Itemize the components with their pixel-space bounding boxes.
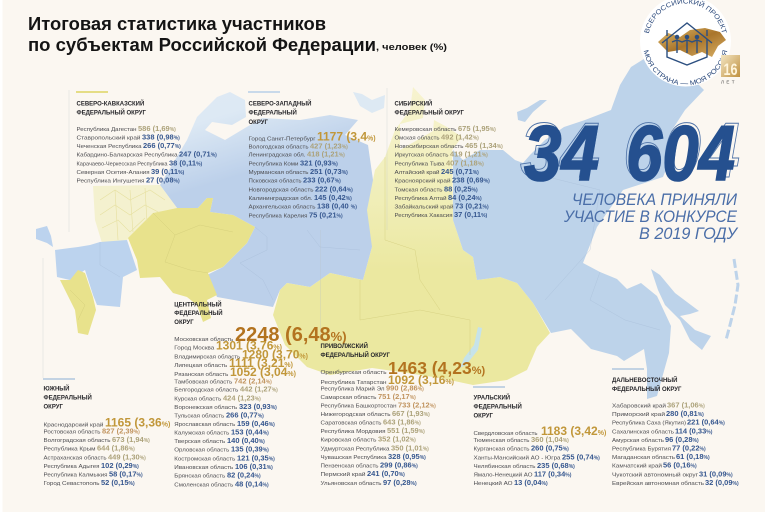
list: North Caucasus regions: 38 (0,11%) [169,158,202,167]
list: Central regions: 742 (2,14%) [234,376,272,385]
list: Ural regions: Ханты-Мансийский АО - Югра [474,454,561,461]
list: Northwestern regions: Псковская область [248,179,302,185]
list: Volga regions: Нижегородская область [320,412,390,418]
list: Volga regions: 1092 (3,16%) [388,373,454,387]
list: Northwestern regions: Мурманская область [248,170,308,176]
list: Ural regions: 255 (0,74%) [562,452,600,461]
list: Central regions: Брянская область [174,474,225,480]
list: Central regions: 153 (0,44%) [231,428,269,437]
region: Kaliningrad exclave [36,226,53,247]
list: Central regions: Калужская область [174,431,229,437]
list: Central regions: 82 (0,24%) [227,471,261,480]
heading: Southern: ЮЖНЫЙ [44,385,69,393]
list: North Caucasus regions: 39 (0,11%) [151,167,184,176]
list: Siberian regions: 492 (1,42%) [441,132,479,141]
heading: Ural: УРАЛЬСКИЙ [474,394,510,402]
region: Southern blue [55,240,137,307]
list: Southern regions: 449 (1,30%) [108,452,146,461]
heading: North Caucasus: ФЕДЕРАЛЬНЫЙ ОКРУГ [76,109,146,117]
big number: 34 604: 604 [626,109,735,197]
list: Far Eastern regions: 77 (0,22%) [672,444,706,453]
heading: Siberian: СИБИРСКИЙ [394,100,432,108]
list: Northwestern regions [248,130,376,219]
list: Volga regions: 733 (2,12%) [398,400,436,410]
list: North Caucasus regions: Ставропольский край [76,135,140,142]
list: Siberian regions: 465 (1,34%) [465,141,503,150]
heading: Volga: ПРИВОЛЖСКИЙ [320,342,368,350]
list: Northwestern regions: 251 (0,73%) [310,167,348,176]
list: Far Eastern regions: 31 (0,09%) [699,469,733,478]
list: Volga regions: 751 (2,17%) [378,392,416,401]
list: North Caucasus regions: Северная Осетия-Алания [76,170,150,176]
region: pale Arctic islands [353,92,385,113]
list: Southern regions: Краснодарский край [44,422,104,428]
list: Siberian regions: 407 (1,18%) [446,158,484,167]
list: Far Eastern regions: 280 (0,81%) [666,409,704,418]
list: North Caucasus regions: 266 (0,77%) [143,141,181,150]
list: Northwestern regions: Республика Коми [248,161,298,167]
lake Baikal [460,327,482,368]
badge: 16 лет [721,55,740,84]
list: Southern regions: Волгоградская область [44,438,110,444]
heading: Ural: ОКРУГ [474,413,493,419]
big number: 34 604: 34 [524,109,599,197]
logo: Всероссийский проект [640,0,731,86]
list: Central regions: 442 (1,27%) [240,385,278,394]
list: Central regions: Белгородская область [174,388,238,394]
list: Southern regions: 644 (1,86%) [97,444,135,453]
title [28,14,447,55]
list: Ural regions: 260 (0,75%) [531,444,569,453]
list: Far Eastern regions: Камчатский край [612,463,662,470]
list: Southern regions: 102 (0,29%) [101,461,139,470]
list: Southern regions: Республика Крым [44,447,96,453]
guide lines [43,88,387,378]
list: Far Eastern regions [612,400,739,487]
list: Central regions: Владимирская область [174,354,240,360]
list: Southern regions: Республика Калмыкия [44,473,108,479]
list: North Caucasus regions: Кабардино-Балкарская Республика [76,153,178,159]
panel: Volga district [320,342,485,487]
region borders [70,157,660,355]
list: Northwestern regions: Новгородская область [248,187,314,193]
list: Central regions: Тамбовская область [174,379,232,385]
list: Central regions [174,324,347,488]
list: Volga regions: Ульяновская область [320,481,382,487]
title: Итоговая статистика участников [28,14,326,34]
list: Northwestern regions: 138 (0,40 %) [317,202,357,211]
icon: house with people [662,23,712,65]
list: Volga regions: 551 (1,59%) [387,426,425,435]
list: Northwestern regions: Ленинградская обл. [248,153,306,159]
list: Northwestern regions: 1177 (3,4%) [317,130,376,144]
heading: Northwestern: ОКРУГ [248,120,268,126]
list: Volga regions: Удмуртская Республика [320,446,390,452]
region: North Caucasus yellow [60,270,96,335]
list: Ural regions: Челябинская область [474,464,536,470]
list: Volga regions: 990 (2,86%) [386,384,424,392]
big number: 34 604: 604 [623,106,740,194]
list: Volga regions: 1463 (4,23%) [388,358,485,378]
list: Far Eastern regions: Магаданская область [612,455,675,461]
list: Southern regions: Астраханская область [44,455,106,461]
panel: Southern district [43,378,170,487]
heading: Central: ОКРУГ [174,320,194,326]
list: Central regions: 121 (0,35%) [237,453,275,462]
list: Siberian regions: Томская область [394,187,442,193]
list: Central regions: Город Москва [174,346,215,352]
heading: Northwestern: СЕВЕРО-ЗАПАДНЫЙ [248,100,311,108]
caption: В 2019 ГОДУ [639,225,738,243]
list: Northwestern regions: Архангельская область [248,205,316,211]
big number: 34 604 [520,106,740,197]
list: Central regions: Воронежская область [174,405,237,411]
region: Okhotsk coast island [651,269,711,350]
list: Southern regions: 1165 (3,36%) [105,416,170,430]
heading: Far Eastern: ДАЛЬНЕВОСТОЧНЫЙ [612,376,678,384]
list: Northwestern regions: Калининградская обл. [248,196,313,202]
list: Volga regions: Республика Мордовия [320,429,386,435]
badge: 16 лет: 16 [724,60,738,79]
list: Central regions: Костромская область [174,456,235,462]
list: Central regions: 2248 (6,48%) [235,324,347,346]
list: Central regions: 48 (0,14%) [235,479,269,488]
heading: Central: ЦЕНТРАЛЬНЫЙ [174,300,222,308]
list: Ural regions [474,424,606,487]
list: Central regions: Тульская область [174,413,224,419]
list: Volga regions: Республика Башкортостан [320,404,396,410]
list: Far Eastern regions: Приморский край [612,411,665,418]
list: Volga regions: Республика Марий Эл [320,386,385,392]
list: Southern regions: 827 (2,39%) [102,426,140,436]
panel: North Caucasus district [76,91,217,184]
list: North Caucasus regions: Карачаево-Черкесская Республика [76,161,168,167]
list: Central regions: 159 (0,46%) [237,419,275,428]
list: Volga regions [320,358,485,487]
list: Central regions: 1280 (3,70%) [242,348,308,362]
list: Northwestern regions: Республика Карелия [248,213,308,219]
region: Northwestern district [160,92,375,307]
list: Central regions: 1052 (3,04%) [230,365,296,379]
list: Central regions: 140 (0,40%) [227,436,265,445]
panel: Siberian district [394,100,503,219]
badge: 16 лет: ЛЕТ [721,80,737,84]
heading: North Caucasus: СЕВЕРО-КАВКАЗСКИЙ [76,100,144,108]
list: Volga regions: 352 (1,02%) [378,434,416,444]
list: North Caucasus regions: 586 (1,69%) [138,124,176,133]
heading: Central: ФЕДЕРАЛЬНЫЙ [174,309,223,317]
list: Southern regions: 52 (0,15%) [101,478,135,487]
big number: 34 604: 34 [520,106,600,194]
list: Southern regions: Республика Адыгея [44,464,100,470]
list: Northwestern regions: 233 (0,67%) [303,176,341,185]
caption [563,191,738,243]
list: Far Eastern regions: Еврейская автономная область [612,480,704,487]
list: Volga regions: 350 (1,01%) [391,444,429,452]
region: Far East blue [453,57,704,399]
list: Volga regions: Кировская область [320,438,376,444]
list: Ural regions: Ненецкий АО [474,480,513,487]
heading: Ural: ФЕДЕРАЛЬНЫЙ [474,402,522,410]
list: Central regions: 1301 (3,76%) [216,338,282,352]
list: Southern regions: Город Севастополь [44,481,100,487]
list: North Caucasus regions: Республика Дагестан [76,127,136,133]
list: Siberian regions: 245 (0,71%) [441,167,479,176]
list: Siberian regions: Забайкальский край [394,204,454,211]
list: Central regions: 1111 (3,21%) [229,356,293,370]
list: Volga regions: 643 (1,86%) [383,418,421,426]
list: Far Eastern regions: Амурская область [612,438,664,444]
list: Volga regions: Оренбургская область [320,370,386,376]
list: Siberian regions: 419 (1,21%) [450,150,488,159]
list: Siberian regions: 37 (0,11%) [454,210,487,219]
list: North Caucasus regions: Чеченская Республика [76,144,142,150]
logo text: bottom arc: МОЯ СТРАНА — МОЯ РОССИЯ [644,50,728,86]
list: Siberian regions: 73 (0,21%) [455,202,489,211]
list: Central regions: Липецкая область [174,363,227,369]
map of Russia [36,57,738,399]
list: Volga regions: 667 (1,93%) [392,409,430,418]
list: Northwestern regions: Город Санкт-Петербург [248,136,316,142]
caption: ЧЕЛОВЕКА ПРИНЯЛИ [572,191,737,209]
list: Far Eastern regions: Республика Саха (Якутия) [612,421,686,427]
list: Siberian regions: Иркутская область [394,153,448,159]
list: Far Eastern regions: 61 (0,18%) [676,452,710,461]
list: Central regions: Тверская область [174,439,225,445]
title: по субъектам Российской Федерации [28,35,376,55]
list: Volga regions: 328 (0,95%) [388,452,426,461]
list: Central regions: Рязанская область [174,372,228,378]
list: Far Eastern regions: 367 (1,06%) [667,400,705,409]
list: North Caucasus regions [76,124,217,184]
list: Ural regions: Свердловская область [474,431,538,437]
list: Volga regions: Пензенская область [320,464,378,470]
list: Ural regions: 360 (1,04%) [531,435,569,444]
list: Central regions: Орловская область [174,448,229,454]
region: Siberia and Urals yellow [273,87,550,385]
list: Volga regions: 97 (0,28%) [383,478,417,487]
list: Far Eastern regions: Чукотский автономный округ [612,471,698,478]
list: Northwestern regions: 222 (0,64%) [315,184,353,193]
list: Central regions: Смоленская область [174,482,233,488]
list: Siberian regions: Омская область [394,135,440,141]
list: Volga regions: Самарская область [320,395,376,401]
list: Volga regions: Чувашская Республика [320,455,387,461]
heading: Far Eastern: ФЕДЕРАЛЬНЫЙ ОКРУГ [612,385,682,393]
list: Siberian regions: Новосибирская область [394,144,464,150]
list: Ural regions: Курганская область [474,447,530,453]
list: North Caucasus regions: 338 (0,98%) [142,133,180,142]
panel: Ural district [473,386,606,487]
list: Far Eastern regions: 96 (0,28%) [665,435,699,444]
list: Ural regions: 1183 (3,42%) [541,424,606,438]
list: Northwestern regions: 145 (0,42%) [314,193,352,202]
list: Southern regions: 673 (1,94%) [112,435,150,444]
list: Northwestern regions: Вологодская область [248,144,308,150]
region: northern islands [517,100,547,122]
heading: Southern: ФЕДЕРАЛЬНЫЙ [44,393,92,401]
list: Far Eastern regions: Республика Бурятия [612,447,671,453]
list: Far Eastern regions: 114 (0,33%) [675,426,712,435]
list: Volga regions: Пермский край [320,471,366,478]
list: Far Eastern regions: Хабаровский край [612,402,666,409]
list: Siberian regions: Республика Хакасия [394,213,452,219]
list: Siberian regions: 238 (0,69%) [452,176,490,185]
list: North Caucasus regions: 247 (0,71%) [179,150,217,159]
region: pale yellow west [93,185,177,243]
list: Central regions: 135 (0,39%) [231,445,269,454]
list: Siberian regions: Республика Тыва [394,161,445,167]
region: Central yellow [128,198,255,322]
list: Central regions: Курская область [174,396,221,402]
list: Central regions: Ивановская область [174,465,233,471]
list: North Caucasus regions: 27 (0,08%) [146,175,180,184]
list: Northwestern regions: 321 (0,93%) [300,158,338,167]
list: Far Eastern regions: 56 (0,16%) [663,461,697,470]
list: Volga regions: 241 (0,70%) [367,469,405,478]
list: Ural regions: 13 (0,04%) [514,478,548,487]
list: Volga regions: 299 (0,86%) [380,460,418,470]
list: Ural regions: 117 (0,34%) [534,469,571,478]
title: , человек (%) [376,42,447,53]
list: Southern regions [44,416,170,487]
list: Northwestern regions: 427 (1,23%) [310,141,348,150]
list: Volga regions: Республика Татарстан [320,380,386,386]
list: Siberian regions: 88 (0,25%) [444,184,478,193]
list: Far Eastern regions: Сахалинская область [612,429,674,435]
list: Siberian regions: Республика Алтай [394,195,446,202]
list: Southern regions: Ростовская область [44,430,100,436]
list: Ural regions: 235 (0,68%) [537,461,575,470]
list: Siberian regions [394,124,503,219]
caption: УЧАСТИЕ В КОНКУРСЕ [563,208,738,226]
list: Central regions: Московская область [174,337,233,343]
heading: Siberian: ФЕДЕРАЛЬНЫЙ ОКРУГ [394,109,464,117]
list: Southern regions: 58 (0,17%) [109,470,143,479]
panel: Central district [174,300,347,488]
list: Siberian regions: 84 (0,24%) [448,193,482,202]
heading: Northwestern: ФЕДЕРАЛЬНЫЙ [248,109,297,117]
heading: Southern: ОКРУГ [44,404,63,410]
list: Far Eastern regions: 221 (0,64%) [687,418,725,427]
region: Kuril islands [726,259,738,340]
list: Ural regions: Тюменская область [474,438,530,444]
list: Northwestern regions: 418 (1,21%) [307,150,345,159]
list: Far Eastern regions: 32 (0,09%) [705,478,739,487]
list: Siberian regions: 675 (1,95%) [458,124,496,133]
list: North Caucasus regions: Республика Ингушетия [76,178,144,184]
list: Central regions: Ярославская область [174,422,235,428]
heading: Volga: ФЕДЕРАЛЬНЫЙ ОКРУГ [320,351,390,359]
list: Siberian regions: Красноярский край [394,178,450,185]
list: Siberian regions: Алтайский край [394,169,440,176]
panel: Northwestern district [248,91,376,219]
list: Central regions: 424 (1,23%) [223,393,261,402]
list: Volga regions: Саратовская область [320,420,382,426]
panel: Far Eastern district [612,368,739,487]
list: Siberian regions: Кемеровская область [394,127,456,133]
icon: gold Russia silhouette [658,28,726,57]
list: Ural regions: Ямало-Ненецкий АО [474,471,533,478]
list: Central regions: 106 (0,31%) [235,462,273,471]
list: Central regions: 266 (0,77%) [226,410,264,419]
list: Central regions: 323 (0,93%) [239,402,277,411]
list: Northwestern regions: 75 (0,21%) [309,210,343,219]
